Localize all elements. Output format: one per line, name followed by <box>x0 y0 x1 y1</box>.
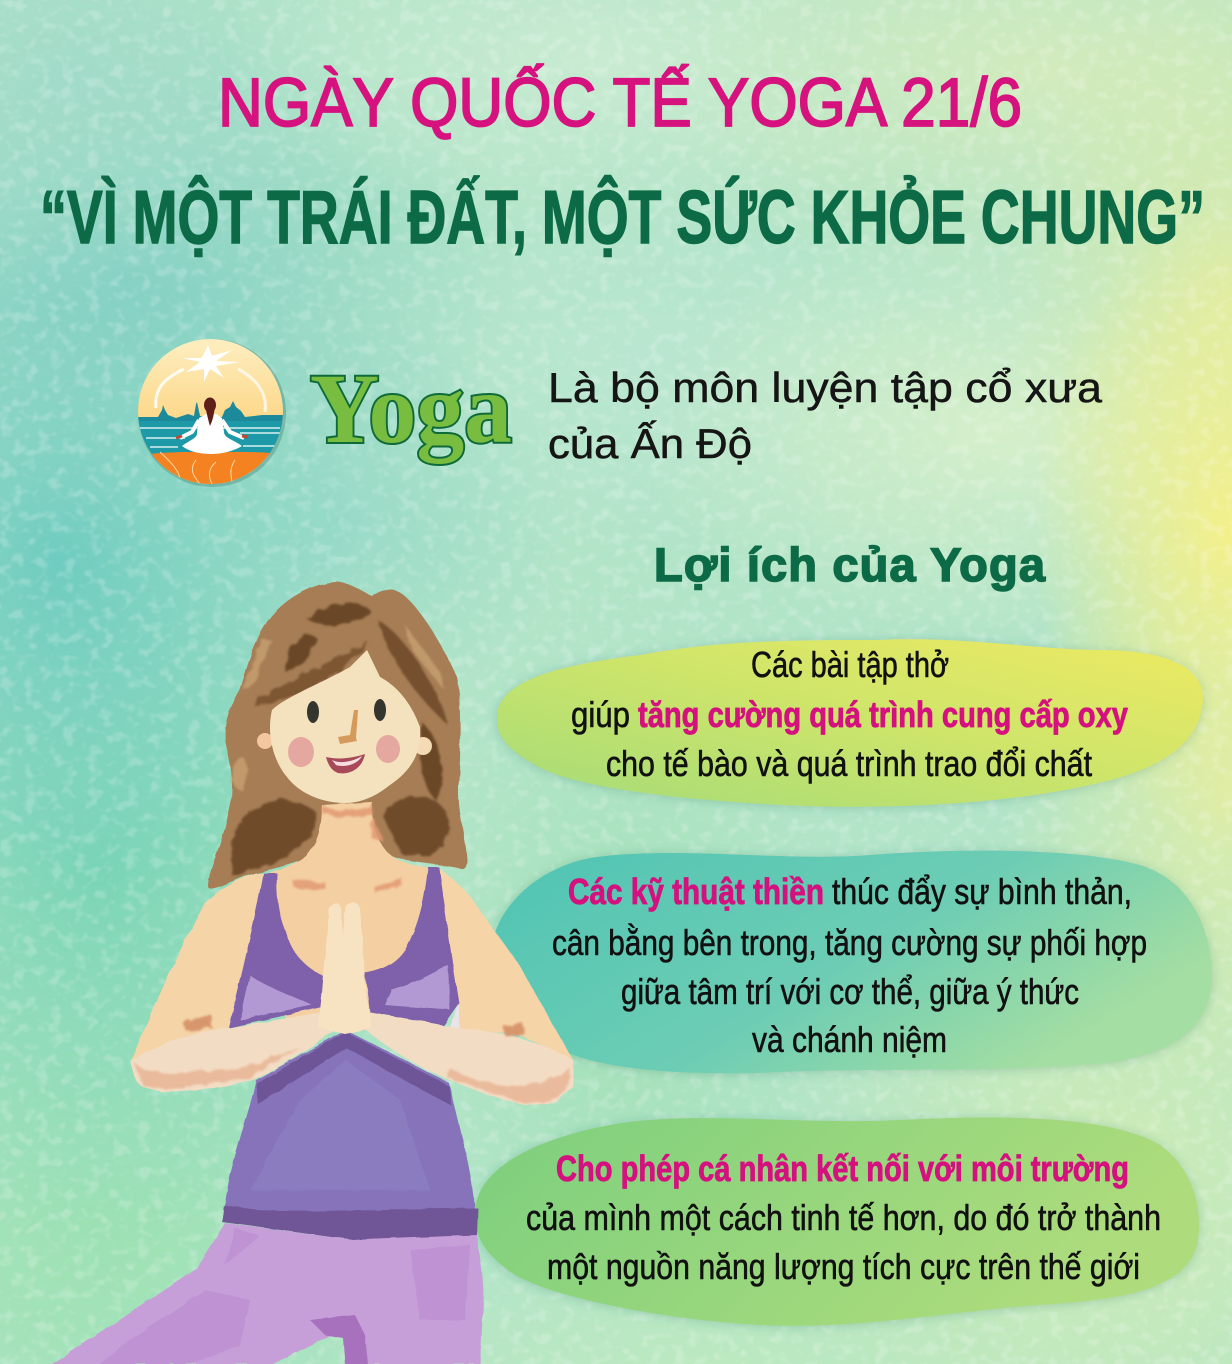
text block: yoga definition: Là bộ môn luyện tập cổ xưa <box>548 364 1103 411</box>
text: benefit 3 <box>526 1148 1161 1287</box>
text: benefit 1: cho tế bào và quá trình trao đổi chất <box>606 743 1092 784</box>
text: benefit 2: và chánh niệm <box>752 1019 947 1060</box>
blob: yellow green <box>497 639 1203 807</box>
icon: Yoga wordmark: Yoga <box>310 353 512 464</box>
blob: green <box>475 1118 1199 1326</box>
text block: yoga definition: của Ấn Độ <box>548 420 752 467</box>
title: date line: NGÀY QUỐC TẾ YOGA 21/6 <box>218 64 1022 141</box>
figure: arms <box>131 868 573 1105</box>
panel: benefit 3 environment <box>475 1118 1199 1326</box>
text: benefit 2: thúc đẩy sự bình thản, <box>832 871 1132 912</box>
text: benefit 3: một nguồn năng lượng tích cực trên thế giới <box>547 1246 1140 1287</box>
text: benefit 1: tăng cường quá trình cung cấp oxy <box>638 694 1128 735</box>
blob: teal <box>490 851 1212 1073</box>
text: benefit 2: Các kỹ thuật thiền <box>568 871 824 912</box>
figure: praying hands <box>318 903 372 1034</box>
panel: benefit 1 breathing <box>497 639 1203 807</box>
figure: face <box>257 650 432 803</box>
text: benefit 2 <box>552 871 1147 1060</box>
text: benefit 1: Các bài tập thở <box>751 644 949 685</box>
figure: hair <box>208 582 467 889</box>
heading: benefits: Lợi ích của Yoga <box>654 538 1046 591</box>
figure: purple pants <box>52 1223 484 1364</box>
text block: yoga definition <box>548 364 1103 467</box>
figure: purple top and torso <box>222 867 490 1240</box>
icon: round yoga logo <box>138 339 286 487</box>
figure: neck and chest <box>265 802 435 1030</box>
panel: benefit 2 meditation <box>490 851 1212 1073</box>
illustration: woman in yoga pose <box>52 582 573 1364</box>
text: benefit 1 <box>571 644 1128 784</box>
text: benefit 2: giữa tâm trí với cơ thể, giữa ý thức <box>621 971 1079 1012</box>
text: benefit 1: giúp <box>571 694 630 735</box>
